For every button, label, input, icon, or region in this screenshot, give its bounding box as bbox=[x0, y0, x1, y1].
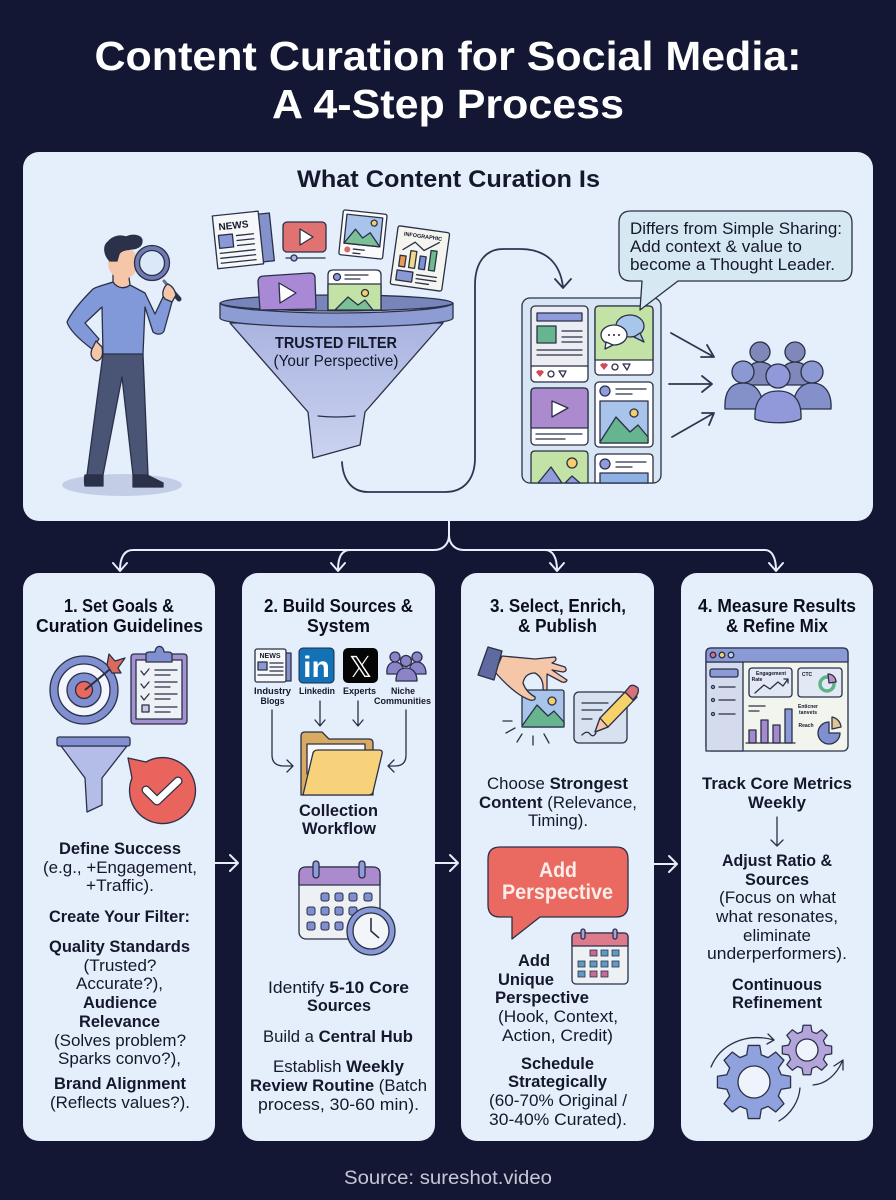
callout: differs from simple sharing: Differs from Simple Sharing: bbox=[630, 220, 842, 238]
feed card: image post bbox=[595, 382, 653, 447]
source labels: Communities bbox=[374, 696, 431, 707]
funnel with trusted filter label: (Your Perspective) bbox=[274, 353, 398, 370]
step 1 text: Create Your Filter: bbox=[49, 908, 190, 926]
icon: small calendar bbox=[572, 929, 628, 984]
step 4 track text: Weekly bbox=[748, 794, 807, 812]
icon: analytics dashboard bbox=[706, 648, 848, 751]
step 3 choose text: Choose Strongest bbox=[487, 775, 629, 793]
icon: analytics dashboard: Enticner bbox=[798, 704, 818, 710]
panel heading: What Content Curation Is bbox=[297, 166, 600, 193]
feed card: cropped post bbox=[595, 454, 653, 483]
icon: infographic sheet: INFOGRAPHIC bbox=[403, 232, 442, 243]
step 2 heading: System bbox=[307, 615, 370, 636]
step 1 heading: Curation Guidelines bbox=[36, 615, 203, 636]
icon: X bbox=[343, 648, 378, 684]
step 3 choose text bbox=[479, 775, 637, 830]
curated feed bbox=[522, 298, 661, 483]
panel: step 3 bbox=[461, 573, 654, 1141]
source labels: Niche bbox=[391, 686, 415, 697]
step 1 text: (e.g., +Engagement, bbox=[43, 859, 197, 877]
step 1 text: (Solves problem? bbox=[54, 1032, 186, 1050]
step 3 perspective text: (Hook, Context, bbox=[498, 1008, 618, 1026]
step 1 text: Relevance bbox=[79, 1013, 160, 1031]
callout: add perspective: Add bbox=[539, 859, 577, 882]
icon: LinkedIn bbox=[299, 648, 334, 684]
step 1 text: Define Success bbox=[59, 840, 181, 858]
step 1 text: Quality Standards bbox=[49, 938, 190, 956]
source labels: Experts bbox=[343, 686, 376, 697]
title: A 4-Step Process bbox=[272, 81, 624, 127]
step 4 refinement text: Refinement bbox=[732, 994, 822, 1012]
step 3 schedule text bbox=[489, 1055, 627, 1129]
step 3 perspective text: Add bbox=[518, 952, 550, 970]
icon: red video player bbox=[283, 222, 326, 261]
icon: newspaper bbox=[212, 210, 275, 269]
step 1 text: Accurate?), bbox=[76, 975, 163, 993]
step 4 track text bbox=[702, 775, 852, 812]
funnel with trusted filter label bbox=[220, 270, 453, 458]
icon: purple video card bbox=[258, 273, 316, 310]
step 3 schedule text: Schedule bbox=[521, 1055, 594, 1073]
step 3 heading bbox=[490, 595, 626, 636]
icon: gears with cycle arrows bbox=[711, 1025, 843, 1121]
connector: top panel to four steps bbox=[113, 521, 783, 571]
feed card: chat bbox=[595, 306, 653, 375]
icon: analytics dashboard: Engagement bbox=[756, 671, 786, 677]
step 4 heading: 4. Measure Results bbox=[698, 595, 856, 616]
step 4 adjust text: Adjust Ratio & bbox=[722, 852, 832, 870]
step 4 refinement text: Continuous bbox=[732, 976, 822, 994]
step 4 adjust text: eliminate bbox=[743, 927, 811, 945]
icon: analytics dashboard: Reach bbox=[798, 723, 814, 729]
icon: communities bbox=[387, 652, 426, 681]
step 3 schedule text: Strategically bbox=[508, 1073, 608, 1091]
step 2 text: Sources bbox=[307, 997, 371, 1015]
icon: analytics dashboard: tanvets bbox=[799, 710, 817, 716]
step 3 perspective text: Unique bbox=[498, 971, 554, 989]
icon: green image card bbox=[328, 270, 381, 310]
panel: step 2 bbox=[242, 573, 435, 1141]
icon: note with pencil bbox=[574, 685, 638, 743]
step 1 text: Audience bbox=[83, 994, 157, 1012]
callout: add perspective: Perspective bbox=[502, 881, 613, 904]
step 4 adjust text: underperformers). bbox=[707, 945, 847, 963]
arrow: step 3 to step 4 bbox=[654, 856, 677, 872]
step 4 adjust text: Sources bbox=[745, 871, 809, 889]
callout: differs from simple sharing: become a Thought Leader. bbox=[630, 256, 835, 274]
step 1 text bbox=[43, 840, 197, 1112]
step 3 schedule text: 30-40% Curated). bbox=[489, 1111, 627, 1129]
step 3 perspective text: Action, Credit) bbox=[502, 1027, 613, 1045]
step 1 text: Sparks convo?), bbox=[58, 1050, 181, 1068]
panel: step 1 bbox=[23, 573, 215, 1141]
icon: news source bbox=[255, 649, 291, 682]
panel: what content curation is bbox=[23, 152, 873, 521]
step 2 text: Review Routine (Batch bbox=[250, 1077, 427, 1095]
step 1 heading: 1. Set Goals & bbox=[64, 595, 174, 616]
step 1 text: Brand Alignment bbox=[54, 1075, 186, 1093]
callout: differs from simple sharing bbox=[619, 211, 852, 310]
icon: red check bubble bbox=[128, 758, 196, 824]
step 4 track text: Track Core Metrics bbox=[702, 775, 852, 793]
title bbox=[94, 33, 802, 127]
step 2 text: Establish Weekly bbox=[273, 1058, 405, 1076]
step 4 refinement text bbox=[732, 976, 822, 1012]
icon: audience group bbox=[725, 342, 831, 423]
callout: add perspective bbox=[488, 847, 628, 939]
arrow: step 1 to step 2 bbox=[215, 855, 238, 871]
icon: analytics dashboard: CTC bbox=[802, 672, 813, 678]
folder caption: Collection bbox=[299, 801, 378, 820]
step 3 schedule text: (60-70% Original / bbox=[489, 1092, 627, 1110]
arrows: sources into folder bbox=[272, 701, 406, 772]
source labels: Blogs bbox=[260, 696, 284, 707]
step 3 perspective text bbox=[495, 952, 618, 1045]
source credit: Source: sureshot.video bbox=[344, 1168, 552, 1189]
folder caption bbox=[299, 801, 378, 838]
step 4 adjust text: what resonates, bbox=[715, 908, 838, 926]
feed card: article bbox=[531, 306, 588, 382]
step 2 heading: 2. Build Sources & bbox=[264, 595, 413, 616]
step 3 perspective text: Perspective bbox=[495, 989, 589, 1007]
icon: analytics dashboard: Rate bbox=[752, 677, 763, 683]
step 1 text: (Trusted? bbox=[84, 957, 156, 975]
step 2 text bbox=[250, 979, 427, 1114]
arrow: track to adjust bbox=[771, 817, 783, 846]
source labels bbox=[254, 686, 431, 707]
icon: news source: NEWS bbox=[260, 653, 281, 660]
arrow: step 2 to step 3 bbox=[435, 855, 458, 871]
icon: LinkedIn: in bbox=[303, 651, 330, 684]
icon: folder bbox=[301, 732, 382, 795]
icon: hand picking photo bbox=[478, 647, 567, 700]
arrow: funnel to feed bbox=[342, 249, 571, 492]
icon: X: 𝕏 bbox=[349, 652, 372, 684]
arrows: feed to audience bbox=[669, 333, 714, 437]
step 1 text: +Traffic). bbox=[86, 877, 154, 895]
step 1 text: (Reflects values?). bbox=[50, 1094, 190, 1112]
icon: newspaper: NEWS bbox=[218, 219, 249, 233]
step 2 text: Identify 5-10 Core bbox=[268, 979, 409, 997]
step 2 text: Build a Central Hub bbox=[263, 1028, 413, 1046]
step 3 choose text: Content (Relevance, bbox=[479, 794, 637, 812]
step 3 heading: 3. Select, Enrich, bbox=[490, 595, 626, 616]
panel: step 4 bbox=[681, 573, 873, 1141]
step 2 text: process, 30-60 min). bbox=[258, 1096, 419, 1114]
icon: photo card bbox=[339, 210, 387, 259]
step 2 heading bbox=[264, 595, 413, 636]
step 4 heading: & Refine Mix bbox=[726, 615, 829, 636]
icon: person with magnifying glass bbox=[62, 235, 182, 496]
icon: funnel bbox=[57, 737, 130, 812]
source labels: Industry bbox=[254, 686, 292, 697]
step 4 adjust text bbox=[707, 852, 847, 963]
step 3 heading: & Publish bbox=[518, 615, 597, 636]
icon: photo with sparkle lines bbox=[503, 690, 564, 745]
icon: target with arrow bbox=[50, 654, 125, 724]
feed card: cropped image bbox=[531, 451, 588, 483]
step 3 choose text: Timing). bbox=[528, 812, 588, 830]
icon: calendar with clock bbox=[299, 861, 395, 955]
title: Content Curation for Social Media: bbox=[94, 33, 802, 79]
icon: checklist clipboard bbox=[131, 646, 187, 724]
icon: infographic sheet bbox=[390, 226, 450, 291]
folder caption: Workflow bbox=[302, 819, 377, 838]
feed card: video bbox=[531, 388, 588, 445]
step 4 heading bbox=[698, 595, 856, 636]
step 4 adjust text: (Focus on what bbox=[719, 889, 836, 907]
step 1 heading bbox=[36, 595, 203, 636]
callout: differs from simple sharing: Add context & value to bbox=[630, 238, 802, 256]
source labels: Linkedin bbox=[299, 686, 335, 697]
icon: content items entering funnel bbox=[212, 210, 453, 458]
funnel with trusted filter label: TRUSTED FILTER bbox=[275, 335, 397, 352]
